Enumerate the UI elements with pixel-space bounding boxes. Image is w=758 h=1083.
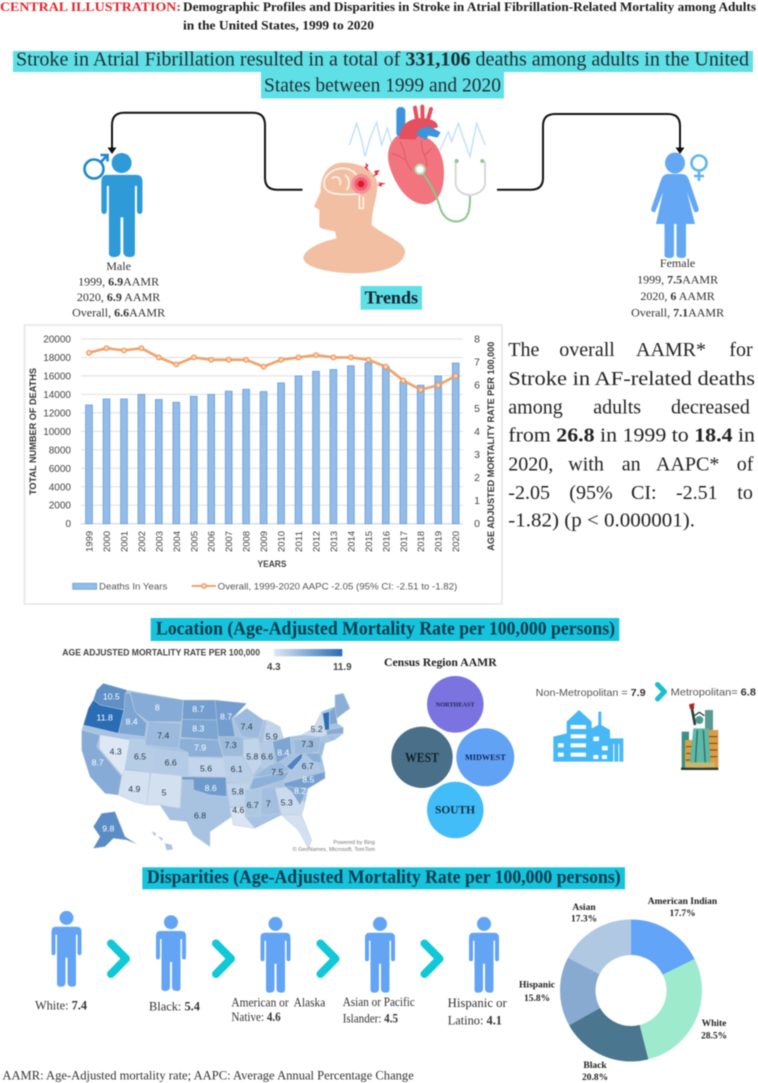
census region circles — [384, 655, 514, 838]
year labels: 2000 — [102, 531, 113, 552]
state value labels: 8.7 — [220, 712, 232, 722]
map credit: © GeoNames, Microsoft, TomTom — [292, 846, 375, 853]
map credit: Powered by Bing — [333, 840, 375, 846]
donut labels: White — [702, 1019, 726, 1029]
female statistics: Overall, 7.1AAMR — [631, 306, 724, 320]
choropleth map of US states: 4.9 — [128, 784, 141, 794]
text block: overall AAMR summary: AAMR* — [636, 339, 706, 361]
left axis numbers — [43, 334, 71, 530]
state value labels: 11.8 — [97, 712, 113, 722]
blue vessel — [396, 107, 405, 137]
state value labels: 8.4 — [277, 747, 290, 757]
year labels: 2006 — [207, 531, 218, 552]
heading: location: Location (Age-Adjusted Mortality Rate per 100,000 persons) — [156, 620, 615, 640]
icon: female figure — [651, 152, 706, 258]
female statistics: 2020, 6 AAMR — [640, 289, 715, 303]
state value labels — [92, 692, 315, 833]
right axis numbers: 0 — [474, 518, 480, 530]
donut chart — [578, 937, 684, 1044]
right axis numbers: 2 — [474, 472, 480, 484]
year labels: 2014 — [346, 531, 357, 552]
state value labels: 9.8 — [102, 823, 115, 833]
year labels: 2010 — [277, 531, 288, 552]
female statistics: 1999, 7.5AAMR — [637, 272, 718, 286]
census region circles: WEST — [405, 751, 440, 766]
choropleth map of US states: 5.9 — [266, 732, 278, 742]
left axis numbers: 16000 — [43, 371, 71, 382]
choropleth map of US states: 6.6 — [165, 758, 177, 768]
right axis numbers: 1 — [474, 495, 480, 507]
left axis numbers: 8000 — [49, 445, 71, 456]
choropleth map of US states: 6.5 — [134, 752, 146, 762]
year labels: 2005 — [189, 531, 200, 552]
choropleth map of US states: 5.2 — [311, 724, 323, 734]
choropleth map of US states: 6.7 — [247, 800, 259, 810]
text block: overall AAMR summary: for — [729, 339, 753, 361]
donut labels: 15.8% — [524, 994, 550, 1004]
text block: overall AAMR summary: -2.51 — [676, 482, 718, 504]
title: in the United States, 1999 to 2020 — [183, 18, 374, 32]
year labels: 2001 — [120, 531, 130, 552]
state value labels: 8.3 — [192, 723, 205, 733]
text block: overall AAMR summary: to — [737, 482, 753, 504]
right axis numbers: 4 — [474, 426, 480, 438]
donut labels: American Indian — [648, 897, 718, 907]
icon: statue of liberty skyline — [681, 703, 718, 770]
year labels: 2011 — [294, 531, 305, 552]
text block: overall AAMR summary — [508, 339, 755, 532]
state value labels: 8.2 — [294, 786, 306, 796]
text block: overall AAMR summary: Stroke in AF-related deaths — [508, 368, 755, 390]
left axis numbers: 4000 — [49, 482, 71, 493]
year labels: 2016 — [381, 531, 392, 552]
census region circles: Census Region AAMR — [384, 655, 497, 669]
right axis numbers: 6 — [474, 380, 480, 392]
figure: Black — [156, 915, 186, 991]
donut labels: Hispanic — [519, 980, 555, 990]
footnote: AAMR: Age-Adjusted mortality rate; AAPC: Average Annual Percentage Change — [2, 1068, 414, 1082]
right axis numbers: 8 — [474, 334, 480, 346]
choropleth map of US states: 6.7 — [302, 761, 314, 771]
year labels: 2020 — [451, 531, 462, 552]
figure: Asian or Pacific Islander — [365, 917, 395, 993]
year labels: 2007 — [224, 531, 235, 552]
figure: White — [52, 911, 82, 987]
year labels: 2012 — [312, 531, 322, 552]
heart — [388, 134, 444, 204]
census region circles: MIDWEST — [465, 753, 506, 762]
choropleth map of US states: 6.1 — [231, 764, 243, 774]
figure: Hispanic or Latino — [469, 917, 499, 993]
left axis numbers: 10000 — [43, 427, 71, 438]
headline banner: States between 1999 and 2020 — [264, 75, 501, 97]
text block: overall AAMR summary: overall — [559, 339, 615, 361]
choropleth map of US states: 4.6 — [232, 805, 245, 815]
choropleth map of US states: 6.6 — [261, 752, 273, 762]
choropleth map of US states — [82, 683, 350, 850]
arrow: to male — [108, 113, 302, 190]
map legend: 11.9 — [333, 662, 352, 673]
choropleth map of US states: 7.3 — [225, 740, 237, 750]
male statistics: 1999, 6.9AAMR — [78, 274, 159, 288]
state value labels: 8.5 — [302, 774, 315, 784]
panel: trends chart — [24, 325, 502, 604]
choropleth map of US states: 5 — [162, 787, 167, 797]
stroke focus — [351, 174, 371, 194]
census region circles: SOUTH — [435, 804, 475, 816]
left axis numbers: 0 — [65, 519, 71, 530]
right axis numbers: 3 — [474, 449, 480, 461]
heart veins — [392, 140, 432, 170]
chart legend: Deaths In Years — [99, 582, 168, 592]
race group rates: Islander: 4.5 — [343, 1012, 398, 1026]
chart legend — [73, 582, 457, 592]
text block: overall AAMR summary: with — [568, 454, 604, 476]
choropleth map of US states: 7.4 — [157, 731, 170, 741]
donut labels: 28.5% — [701, 1031, 727, 1041]
left axis numbers: 18000 — [43, 353, 71, 364]
icon: male figure — [84, 153, 142, 257]
chevron arrow — [658, 684, 664, 699]
line: AAMR trend — [87, 346, 458, 392]
year labels: 2004 — [172, 531, 183, 552]
text block: overall AAMR summary: of — [737, 454, 754, 476]
aorta — [399, 118, 438, 140]
choropleth map of US states: 5.8 — [232, 787, 244, 797]
stethoscope — [415, 159, 485, 222]
text block: overall AAMR summary: an — [622, 454, 641, 476]
text block: overall AAMR summary: decreased — [671, 396, 750, 418]
year labels: 2002 — [137, 531, 148, 552]
x axis title: YEARS — [258, 559, 286, 569]
donut labels: 17.3% — [571, 915, 597, 925]
state value labels: 7.9 — [194, 742, 206, 752]
choropleth map of US states: 5.8 — [246, 752, 259, 762]
chevron arrows between groups — [111, 944, 440, 974]
chart legend: Overall, 1999-2020 AAPC -2.05 (95% CI: -2.51 to -1.82) — [218, 582, 457, 592]
non-metropolitan rate: Non-Metropolitan = 7.9 — [536, 687, 646, 699]
text block: overall AAMR summary: -1.82) (p < 0.000001). — [508, 510, 695, 532]
female statistics: Female — [660, 256, 695, 270]
icon: city buildings — [553, 710, 623, 762]
text block: overall AAMR summary: The — [508, 339, 540, 361]
donut labels: Black — [583, 1061, 607, 1071]
headline banner — [13, 49, 753, 98]
choropleth map of US states: 7.5 — [271, 767, 284, 777]
headline banner: Stroke in Atrial Fibrillation resulted in a total of 331,106 deaths among adults in the United — [16, 49, 749, 71]
left axis numbers: 14000 — [43, 390, 71, 401]
right axis numbers: 7 — [474, 357, 480, 369]
mainland silhouette — [82, 683, 350, 848]
map legend: AGE ADJUSTED MORTALITY RATE PER 100,000 — [62, 647, 260, 657]
right axis numbers: 5 — [474, 403, 480, 415]
race group rates: White: 7.4 — [35, 998, 88, 1012]
year labels: 2003 — [154, 531, 165, 552]
male statistics — [72, 259, 165, 320]
brain outline — [324, 168, 363, 208]
race group rates: American or Alaska — [231, 996, 326, 1010]
text block: overall AAMR summary: AAPC* — [656, 454, 719, 476]
left axis numbers: 6000 — [49, 464, 71, 475]
figure: American Indian or Alaska Native — [260, 917, 290, 993]
text block: overall AAMR summary: among — [508, 396, 563, 418]
race group rates: Native: 4.6 — [231, 1010, 281, 1024]
left axis numbers: 2000 — [49, 501, 71, 512]
donut labels: 17.7% — [669, 909, 696, 919]
text block: overall AAMR summary: adults — [593, 396, 641, 418]
choropleth map of US states: 7 — [266, 798, 271, 808]
state value labels: 10.5 — [103, 692, 120, 702]
census region circles: NORTHEAST — [436, 702, 475, 708]
year labels: 2018 — [416, 531, 427, 552]
left axis title: TOTAL NUMBER OF DEATHS — [28, 368, 38, 495]
choropleth map of US states: 5.6 — [200, 763, 212, 773]
choropleth map of US states: 7.3 — [301, 739, 314, 749]
aortic branches — [415, 107, 431, 122]
female statistics — [631, 256, 724, 320]
race group rates: Black: 5.4 — [149, 1000, 201, 1014]
head silhouette — [303, 163, 405, 273]
year labels: 2008 — [242, 531, 253, 552]
race group rates — [35, 995, 508, 1027]
choropleth map of US states: 7.4 — [241, 722, 253, 732]
state value labels: 8.4 — [126, 717, 138, 727]
text block: overall AAMR summary: (95% — [569, 482, 613, 504]
arrow: to female — [497, 114, 684, 190]
right axis title: AGE ADJUSTED MORTALITY RATE PER 100,000 — [486, 342, 496, 551]
map credit — [292, 840, 375, 853]
heading: trends: Trends — [365, 288, 418, 308]
lightning marks — [364, 163, 386, 187]
year labels: 2015 — [364, 531, 375, 552]
race group rates: Asian or Pacific — [343, 995, 415, 1009]
male statistics: Overall, 6.6AAMR — [72, 306, 165, 320]
title — [0, 0, 756, 32]
text block: overall AAMR summary: from 26.8 in 1999 to 18.4 in — [508, 425, 755, 447]
left axis numbers: 20000 — [43, 334, 71, 346]
metropolitan rate: Metropolitan= 6.8 — [671, 686, 756, 698]
year labels: 2009 — [259, 531, 270, 552]
donut labels — [519, 897, 727, 1083]
male statistics: Male — [106, 259, 131, 273]
race group rates: Hispanic or — [448, 996, 508, 1010]
year labels — [84, 531, 462, 552]
right axis numbers — [474, 334, 480, 530]
choropleth map of US states: 4.3 — [110, 747, 122, 757]
choropleth map of US states: 6.8 — [194, 811, 206, 821]
left axis numbers: 12000 — [43, 408, 71, 419]
year labels: 2013 — [329, 531, 340, 552]
text block: overall AAMR summary: CI: — [631, 482, 657, 504]
race group rates: Latino: 4.1 — [448, 1013, 502, 1027]
year labels: 2017 — [399, 531, 410, 552]
pulmonary artery — [417, 127, 441, 140]
icon: stroke and heart illustration — [303, 107, 485, 273]
donut labels: 20.8% — [582, 1073, 608, 1083]
text block: overall AAMR summary: -2.05 — [508, 482, 550, 504]
heading: disparities: Disparities (Age-Adjusted Mortality Rate per 100,000 persons) — [147, 868, 621, 888]
state value labels: 8.7 — [92, 758, 104, 768]
bars: deaths — [86, 363, 459, 524]
state value labels: 8.6 — [205, 783, 217, 793]
donut labels: Asian — [572, 903, 596, 913]
map legend: 4.3 — [267, 662, 281, 673]
state value labels: 8 — [155, 703, 160, 713]
choropleth map of US states: 5.3 — [281, 798, 293, 808]
ECG waves — [349, 122, 485, 157]
state value labels: 8.7 — [192, 704, 205, 714]
text block: overall AAMR summary: 2020, — [508, 454, 553, 476]
map legend — [62, 647, 352, 673]
year labels: 1999 — [84, 531, 96, 552]
year labels: 2019 — [434, 531, 445, 552]
male statistics: 2020, 6.9 AAMR — [77, 290, 160, 304]
